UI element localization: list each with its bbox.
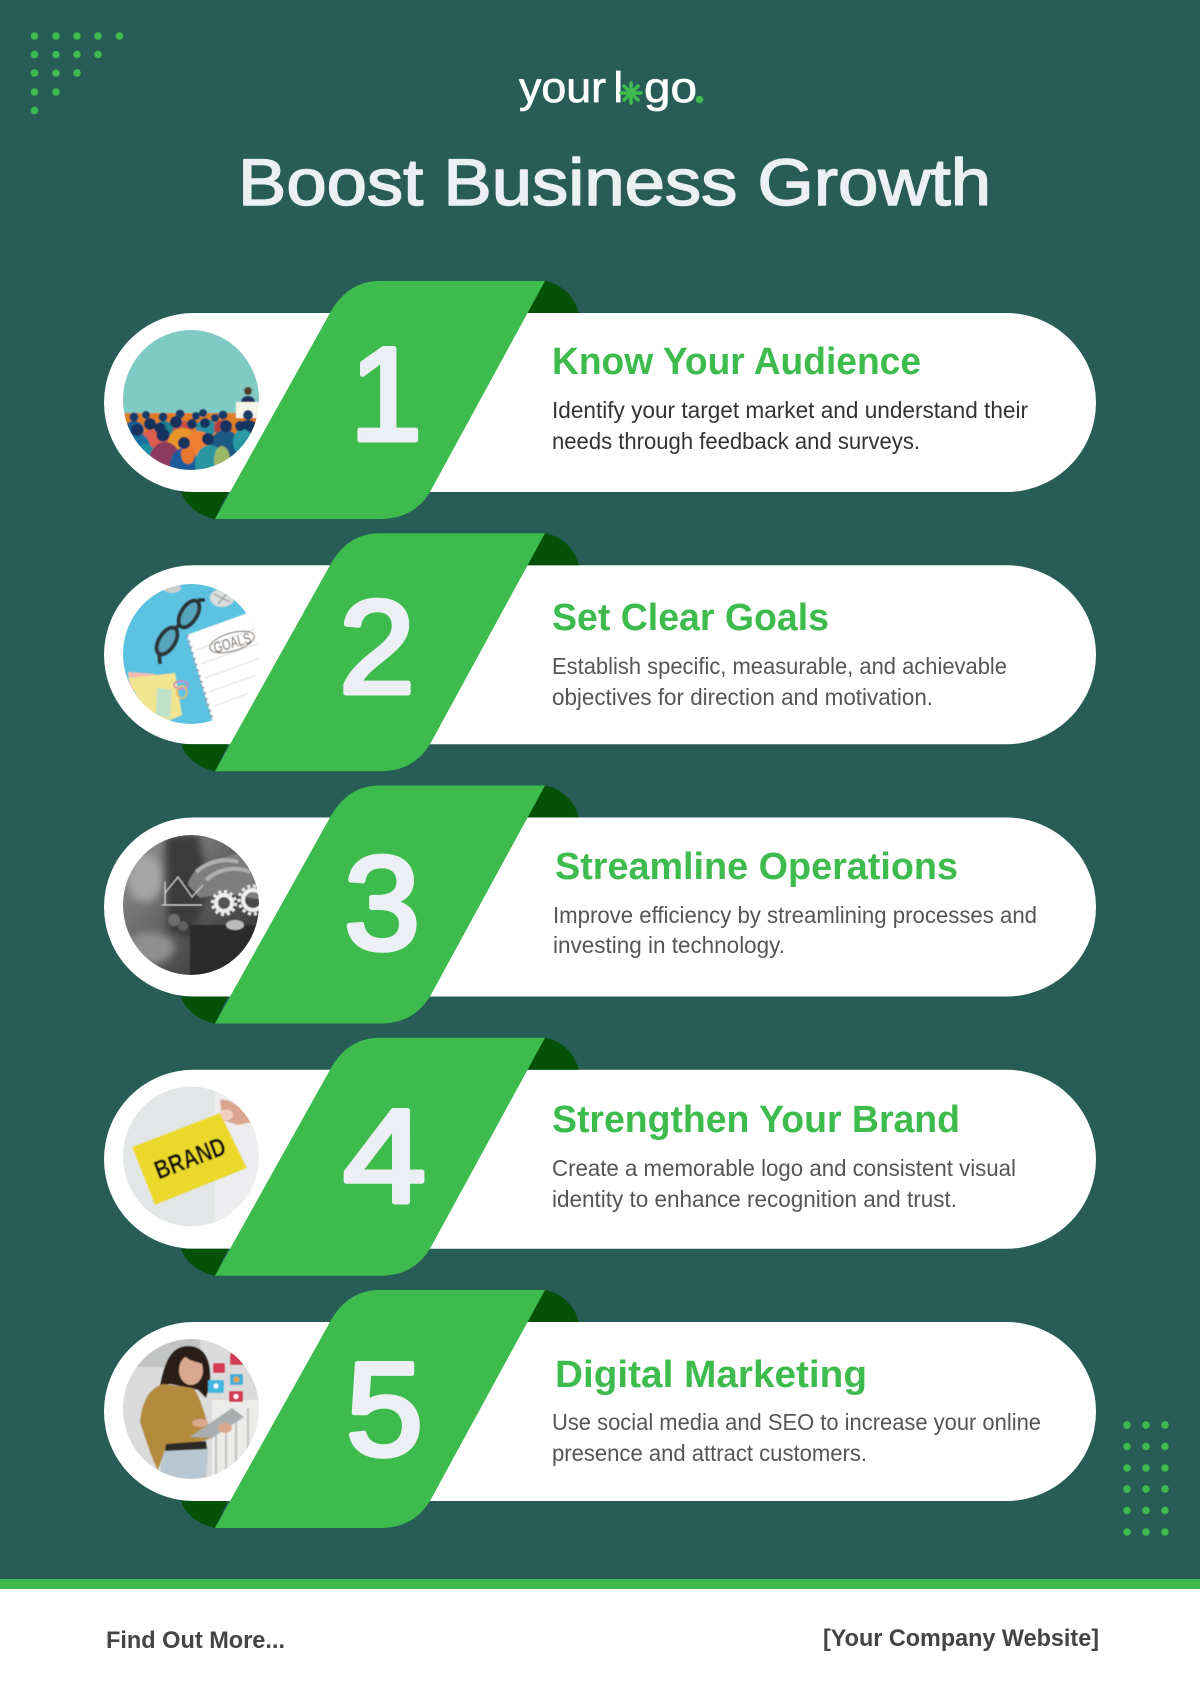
description 4: Create a memorable logo and consistent visual <box>552 1155 1016 1181</box>
footer <box>0 1579 1200 1691</box>
logo: go <box>644 64 697 112</box>
number 2: 2 <box>339 574 415 722</box>
description 2: Establish specific, measurable, and achievable <box>552 653 1007 679</box>
description 3: Improve efficiency by streamlining processes and <box>553 902 1037 928</box>
dot pattern: top left <box>31 32 123 114</box>
heading: Streamline Operations: Streamline Operations <box>555 846 958 888</box>
description 2: objectives for direction and motivation. <box>552 684 933 710</box>
step 4 banner <box>104 1038 1096 1276</box>
logo <box>519 64 703 112</box>
photo: woman with tablet and social media icons <box>120 1337 262 1481</box>
step 1 <box>104 281 1096 519</box>
heading: Set Clear Goals: Set Clear Goals <box>552 597 829 639</box>
photo: monochrome hand touching gears and charts <box>123 835 259 975</box>
step 2 <box>104 533 1096 771</box>
logo: your <box>519 64 606 112</box>
footer: find out more: Find Out More... <box>106 1627 285 1654</box>
step 3 <box>104 786 1096 1024</box>
footer: company website: [Your Company Website] <box>823 1625 1099 1652</box>
description 3: investing in technology. <box>553 932 785 958</box>
heading: Know Your Audience: Know Your Audience <box>552 341 921 383</box>
description 1: Identify your target market and understand their <box>552 397 1028 423</box>
number 1: 1 <box>350 321 422 469</box>
number 5: 5 <box>346 1336 423 1484</box>
dot pattern: bottom right <box>1123 1421 1169 1536</box>
description 5: Use social media and SEO to increase your online <box>552 1409 1041 1435</box>
number 4: 4 <box>343 1083 426 1231</box>
photo: hand holding yellow brand card: BRAND <box>150 1131 230 1185</box>
heading: Strengthen Your Brand: Strengthen Your Brand <box>552 1099 960 1141</box>
logo: l <box>614 64 623 112</box>
description 1: needs through feedback and surveys. <box>552 428 920 454</box>
photo: audience listening to speaker <box>123 330 259 470</box>
photo: notebook labelled goals with glasses <box>123 584 259 724</box>
step 5 <box>104 1290 1096 1528</box>
description 4: identity to enhance recognition and trust. <box>552 1186 957 1212</box>
step 4 <box>104 1038 1096 1276</box>
step 1 banner <box>104 281 1096 519</box>
step 5 banner <box>104 1290 1096 1528</box>
description 5: presence and attract customers. <box>552 1440 867 1466</box>
title: Boost Business Growth <box>238 145 991 219</box>
step 3 banner <box>104 786 1096 1024</box>
step 2 banner <box>104 533 1096 771</box>
number 3: 3 <box>344 830 420 978</box>
photo: notebook labelled goals with glasses: GOALS <box>212 630 253 657</box>
photo: hand holding yellow brand card <box>120 1084 262 1230</box>
heading: Digital Marketing: Digital Marketing <box>555 1354 867 1396</box>
